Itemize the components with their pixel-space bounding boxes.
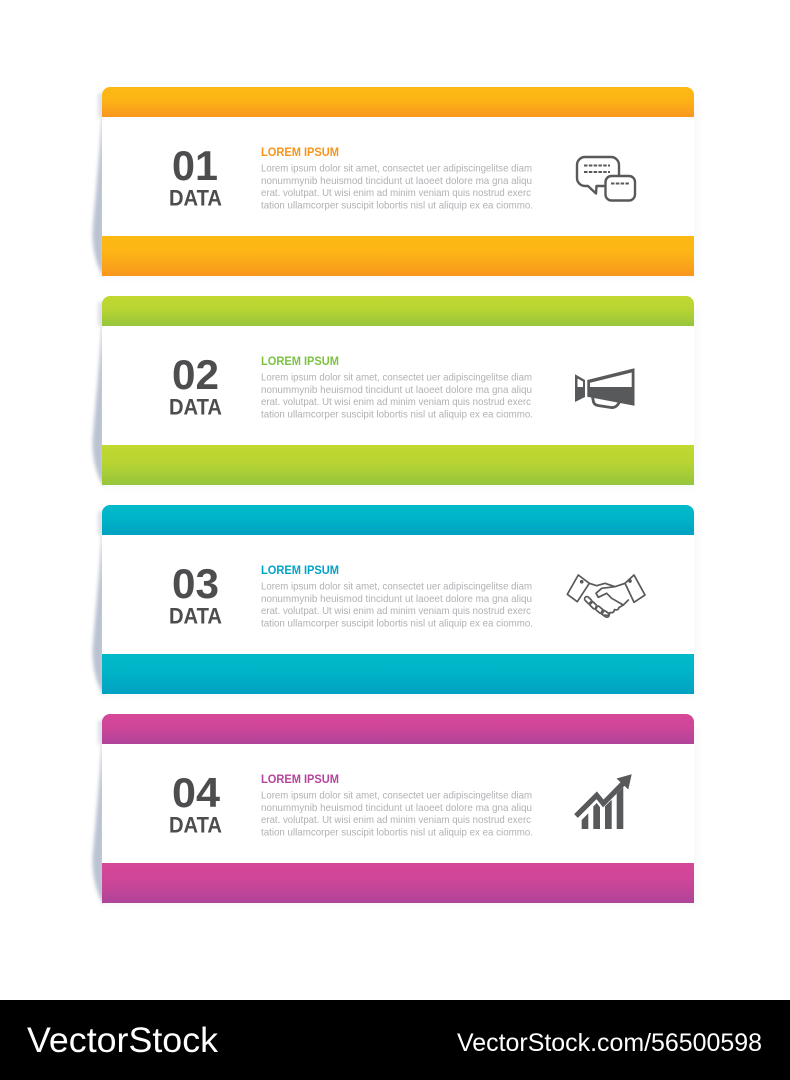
teal bottom band [102, 654, 694, 694]
green bottom band [102, 445, 694, 485]
icon: chat bubbles [577, 157, 635, 200]
body text: tation ullamcorper suscipit lobortis nisl ut aliquip ex ea ciommo. [261, 408, 533, 420]
heading: LOREM IPSUM [261, 354, 339, 368]
number 04: 04 [172, 769, 221, 816]
body text [261, 372, 533, 420]
body text: Lorem ipsum dolor sit amet, consectet uer adipiscingelitse diam [261, 580, 532, 592]
magenta top band [102, 714, 694, 744]
VectorStock logo: VectorStock [27, 1021, 219, 1060]
heading: LOREM IPSUM [261, 772, 339, 786]
body text: erat. volutpat. Ut wisi enim ad minim veniam quis nostrud exerc [261, 605, 531, 617]
panel: item 02 [93, 296, 698, 488]
heading: LOREM IPSUM [261, 563, 339, 577]
label DATA: DATA [169, 186, 222, 210]
green top band [102, 296, 694, 326]
body text [261, 580, 533, 630]
footer bar [0, 1000, 790, 1080]
panel: item 01 [93, 87, 698, 279]
icon: megaphone [575, 368, 634, 408]
teal top band [102, 505, 694, 535]
body text: nonummynib heuismod tincidunt ut laoeet dolore ma gna aliqu [261, 593, 532, 605]
label DATA: DATA [169, 812, 222, 838]
body text: nonummynib heuismod tincidunt ut laoeet dolore ma gna aliqu [261, 175, 532, 187]
body text: nonummynib heuismod tincidunt ut laoeet dolore ma gna aliqu [261, 802, 532, 814]
body text: tation ullamcorper suscipit lobortis nisl ut aliquip ex ea ciommo. [261, 618, 533, 630]
orange bottom band [102, 236, 694, 276]
image URL: VectorStock.com/56500598 [457, 1029, 762, 1057]
body text: erat. volutpat. Ut wisi enim ad minim veniam quis nostrud exerc [261, 187, 531, 199]
number 02: 02 [172, 351, 219, 398]
body text [261, 790, 533, 838]
panel: item 04 [93, 714, 698, 906]
number 01: 01 [172, 142, 218, 189]
body text: Lorem ipsum dolor sit amet, consectet uer adipiscingelitse diam [261, 790, 532, 802]
body text: tation ullamcorper suscipit lobortis nisl ut aliquip ex ea ciommo. [261, 200, 533, 212]
body text: Lorem ipsum dolor sit amet, consectet uer adipiscingelitse diam [261, 372, 532, 384]
magenta bottom band [102, 863, 694, 903]
label DATA: DATA [169, 394, 222, 420]
orange top band [102, 87, 694, 117]
body text [261, 162, 533, 212]
number 03: 03 [172, 560, 219, 607]
body text: Lorem ipsum dolor sit amet, consectet uer adipiscingelitse diam [261, 162, 532, 174]
icon: rising chart [576, 774, 632, 829]
body text: tation ullamcorper suscipit lobortis nisl ut aliquip ex ea ciommo. [261, 826, 533, 838]
body text: erat. volutpat. Ut wisi enim ad minim veniam quis nostrud exerc [261, 814, 531, 826]
body text: erat. volutpat. Ut wisi enim ad minim veniam quis nostrud exerc [261, 396, 531, 408]
body text: nonummynib heuismod tincidunt ut laoeet dolore ma gna aliqu [261, 384, 532, 396]
icon: handshake [567, 575, 645, 618]
label DATA: DATA [169, 604, 222, 628]
heading: LOREM IPSUM [261, 145, 339, 159]
panel: item 03 [93, 505, 698, 697]
